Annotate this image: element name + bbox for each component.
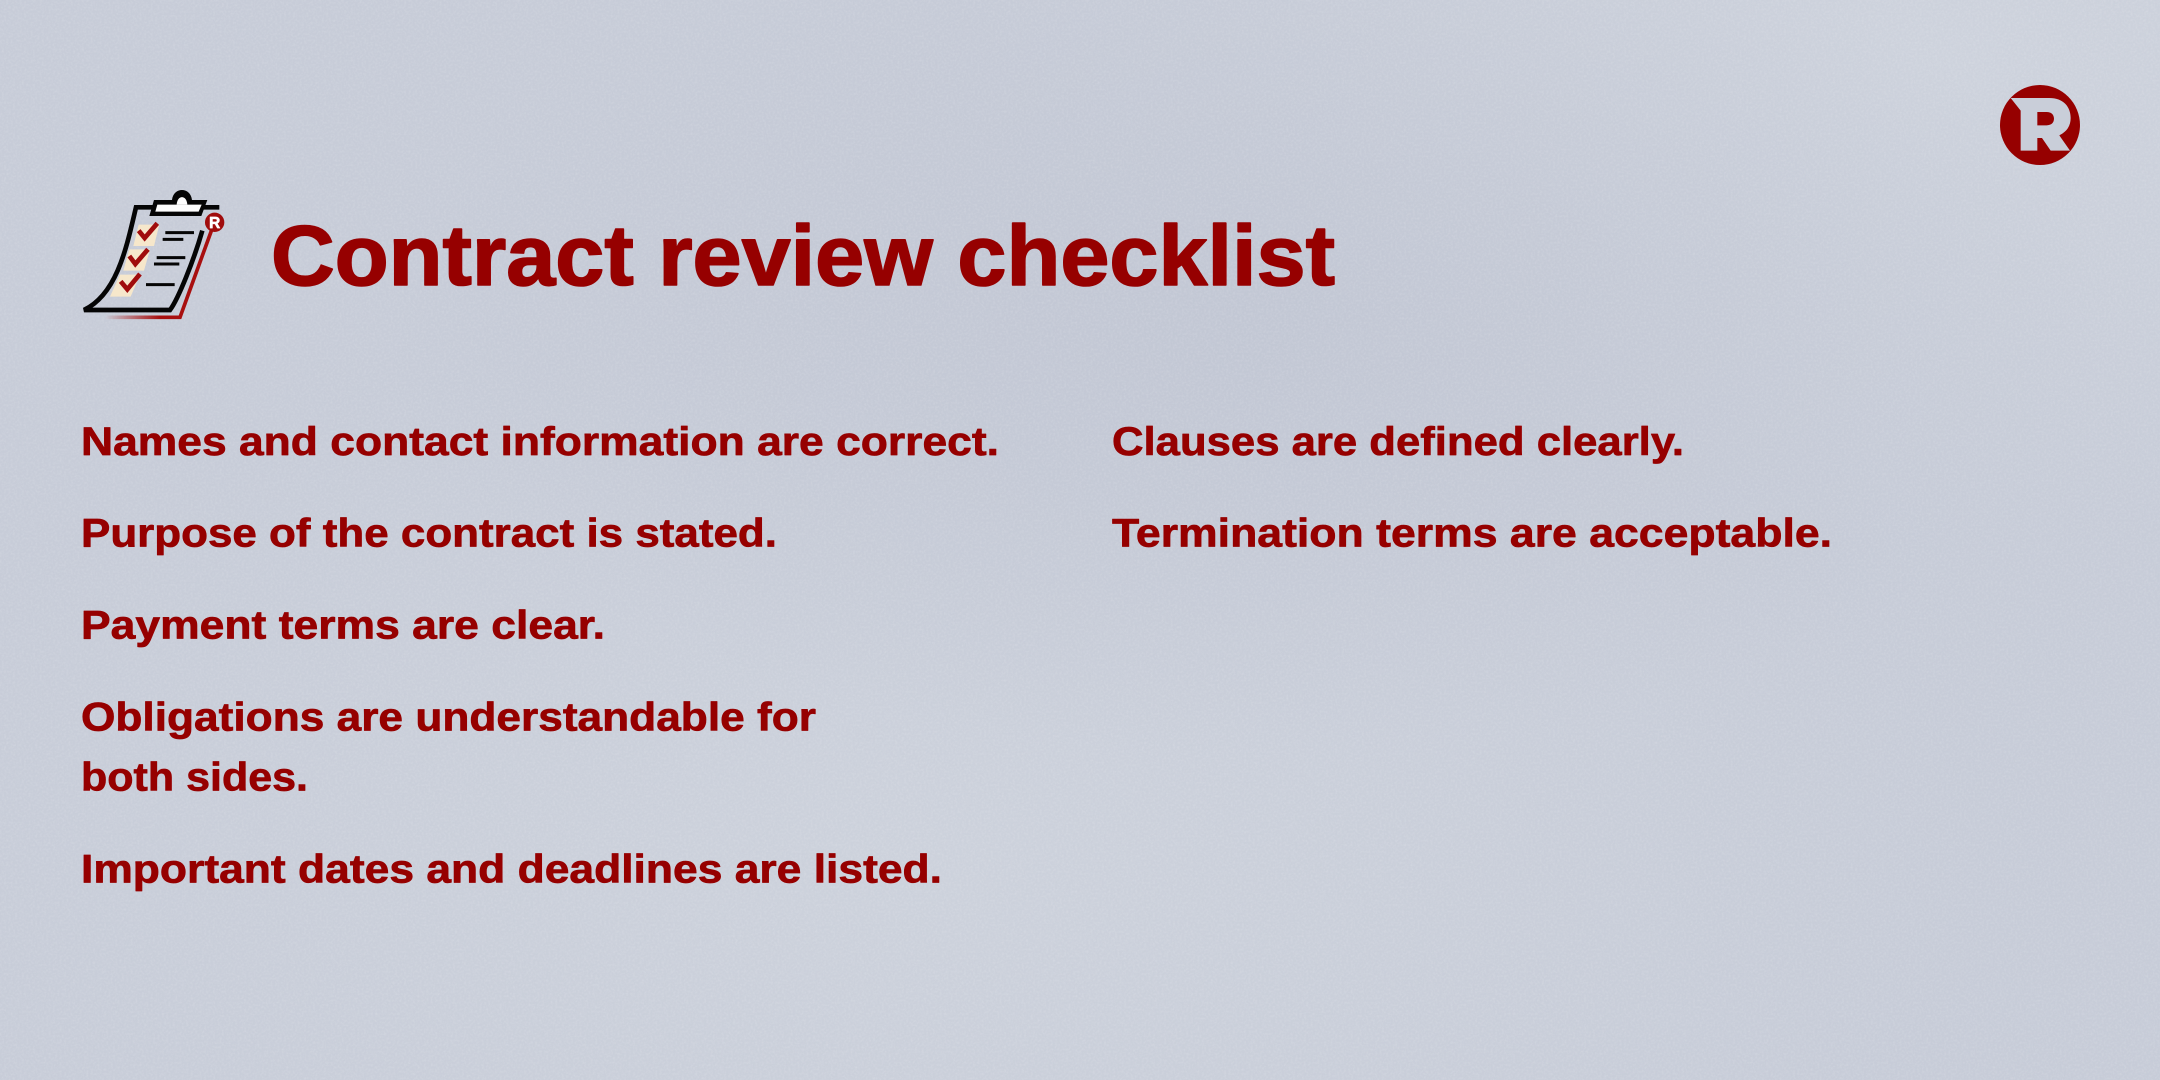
icon: R badge: R — [209, 215, 220, 232]
item: obligations — [81, 696, 816, 800]
item: names: Names and contact information are correct. — [81, 420, 999, 464]
checklist: right column — [1112, 420, 1832, 556]
icon: red page shadow line — [105, 230, 212, 317]
item: obligations: Obligations are understandable for — [81, 696, 816, 740]
item: payment: Payment terms are clear. — [81, 604, 605, 648]
title: Contract review checklist — [271, 209, 1335, 304]
icon: check boxes — [110, 225, 159, 297]
item: dates: Important dates and deadlines are listed. — [81, 848, 942, 892]
icon: R badge — [205, 213, 224, 232]
item: obligations: both sides. — [81, 756, 308, 800]
icon: clip — [149, 190, 207, 216]
icon: text lines — [146, 233, 194, 285]
item: clauses: Clauses are defined clearly. — [1112, 420, 1684, 464]
item: purpose: Purpose of the contract is stated. — [81, 512, 777, 556]
checklist: left column — [81, 420, 999, 892]
item: termination: Termination terms are acceptable. — [1112, 512, 1832, 556]
icon: clipboard checklist — [84, 190, 224, 317]
icon: clipboard sheet — [84, 207, 219, 310]
icon: check marks — [121, 223, 157, 289]
logo: R in red circle — [2000, 85, 2080, 165]
